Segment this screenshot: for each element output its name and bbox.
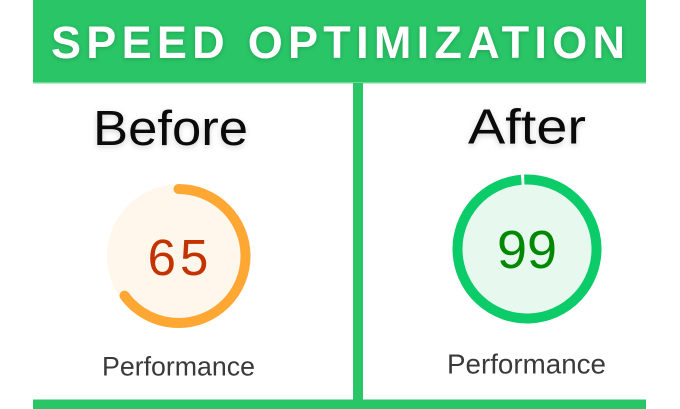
- score value 65: 65: [148, 229, 212, 286]
- heading: before: Before: [93, 102, 248, 156]
- label: performance before: Performance: [102, 352, 255, 382]
- heading: after: After: [468, 100, 586, 154]
- gauge: score 99: [455, 177, 599, 321]
- gauge: score 65: [107, 184, 250, 328]
- vertical divider: [353, 83, 363, 400]
- header banner: [33, 0, 646, 84]
- label: performance after: Performance: [447, 348, 606, 380]
- score value 99: 99: [497, 220, 557, 280]
- title: SPEED OPTIMIZATION: [51, 17, 625, 68]
- bottom bar: [33, 400, 646, 409]
- panel: before: [93, 102, 255, 382]
- panel: after: [447, 100, 606, 380]
